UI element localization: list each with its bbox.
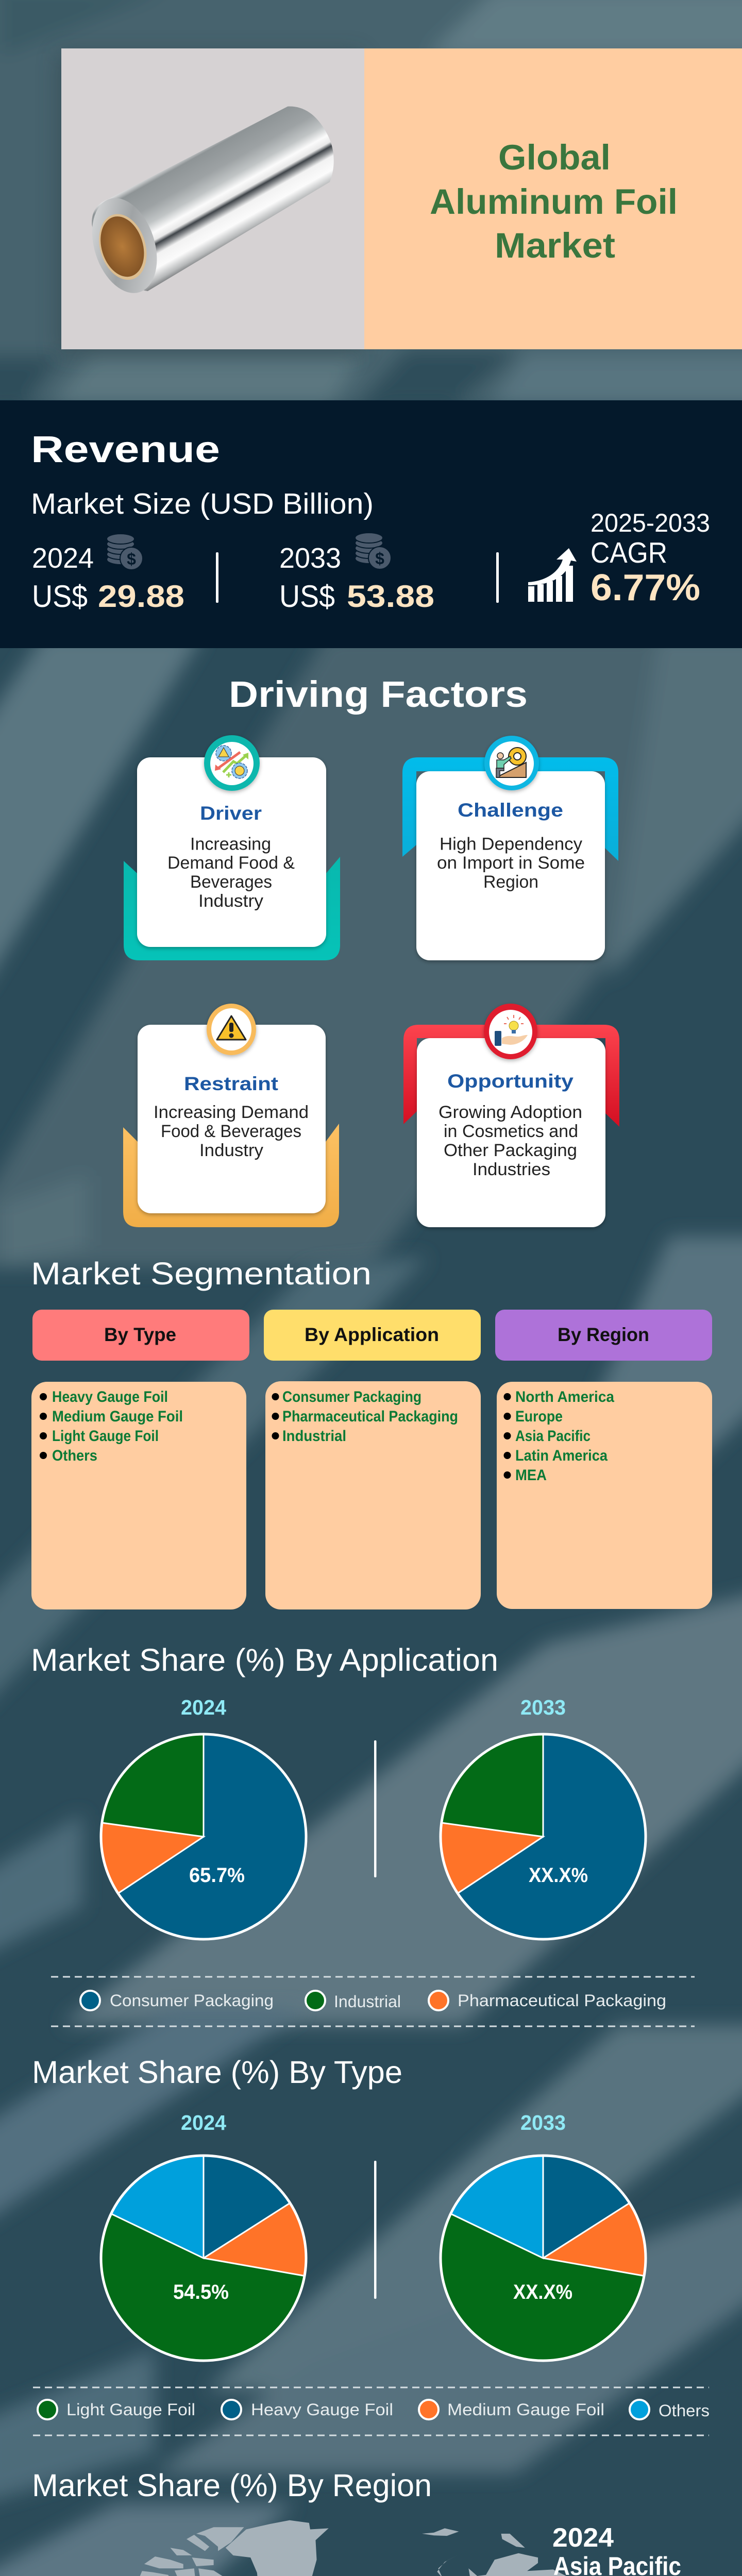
list: region segments: Europe — [515, 1408, 563, 1425]
callout: asia pacific 2024 share — [552, 2523, 681, 2576]
heading: revenue: Revenue — [31, 429, 220, 470]
text: opportunity description: Growing Adoption — [439, 1103, 582, 1122]
stat: 2033 revenue: US$ — [279, 579, 335, 614]
icon: driver gears and arrows — [204, 735, 260, 791]
year label 2024: 2024 — [181, 1696, 226, 1719]
list: type segments — [40, 1388, 183, 1464]
chart: type pies — [101, 2111, 646, 2361]
map: eurasia, africa, oceania — [319, 2528, 668, 2576]
list: type segments: Heavy Gauge Foil — [52, 1388, 168, 1405]
text: challenge description: High Dependency — [440, 835, 582, 854]
list: application segments — [272, 1388, 458, 1445]
text: restraint description: Food & Beverages — [161, 1122, 301, 1141]
chart: application pies — [101, 1696, 646, 1939]
legend: application: Industrial — [334, 1992, 401, 2011]
card: driver — [124, 735, 340, 960]
list: application segments: Industrial — [282, 1428, 346, 1445]
stat: 2033 revenue: 2033 — [279, 542, 341, 574]
column: by application — [264, 1310, 481, 1609]
text: driver description: Increasing — [190, 835, 271, 854]
text: opportunity description: Other Packaging — [444, 1141, 577, 1160]
heading: driving factors: Driving Factors — [229, 674, 528, 715]
year label 2024: 2024 — [181, 2111, 226, 2134]
legend: application — [51, 1977, 695, 2026]
text: opportunity description: in Cosmetics and — [444, 1122, 578, 1141]
list: type segments: Medium Gauge Foil — [52, 1408, 183, 1425]
legend: type: Medium Gauge Foil — [447, 2400, 604, 2419]
text: restraint description: Industry — [199, 1141, 263, 1160]
stat: 2024 revenue: $ — [127, 550, 136, 568]
heading: market segmentation: Market Segmentation — [31, 1256, 372, 1291]
list: region segments: Asia Pacific — [515, 1428, 591, 1445]
column: by type: By Type — [104, 1324, 176, 1345]
text: opportunity description: Industries — [473, 1160, 550, 1179]
text: driver description: Demand Food & — [167, 853, 295, 873]
icon: aluminium foil roll — [81, 107, 334, 301]
text: opportunity description — [439, 1103, 582, 1179]
callout: asia pacific 2024 share: 2024 — [552, 2523, 614, 2553]
stat: CAGR: 6.77% — [591, 567, 700, 608]
pie: type 2024 — [101, 2156, 306, 2361]
text: driver description: Industry — [198, 891, 263, 911]
legend: type — [33, 2387, 710, 2435]
stat: 2024 revenue: 29.88 — [98, 579, 184, 614]
label: driver: Driver — [200, 803, 262, 824]
hero: product image panel — [58, 48, 364, 354]
panel: revenue — [0, 400, 742, 648]
stat: 2033 revenue: 53.88 — [347, 579, 434, 614]
list: region segments: Latin America — [515, 1447, 608, 1464]
map: americas — [70, 2520, 329, 2576]
market size label: Market Size (USD Billion) — [31, 487, 374, 520]
pie: application 2033 — [441, 1734, 646, 1939]
list: type segments: Light Gauge Foil — [52, 1428, 159, 1445]
text: challenge description: on Import in Some — [437, 853, 585, 873]
legend: application: Pharmaceutical Packaging — [458, 1991, 666, 2010]
year label 2033: 2033 — [520, 2111, 566, 2134]
list: region segments: MEA — [515, 1467, 547, 1484]
stat: CAGR: CAGR — [591, 536, 667, 569]
list: type segments: Others — [52, 1447, 97, 1464]
card: opportunity — [403, 1004, 619, 1227]
legend: type: Heavy Gauge Foil — [251, 2400, 393, 2419]
legend: type: Others — [659, 2401, 710, 2420]
legend: application: Consumer Packaging — [110, 1991, 274, 2010]
list: region segments: North America — [515, 1388, 614, 1405]
heading: market share by application: Market Share (%) By Application — [31, 1642, 498, 1677]
pie: type 2033 — [441, 2156, 646, 2361]
column: by region — [495, 1310, 712, 1609]
text: driver description: Beverages — [190, 872, 272, 892]
stat: 2024 revenue: 2024 — [32, 542, 94, 574]
pie: application 2033: XX.X% — [529, 1864, 588, 1887]
title: Market — [495, 226, 615, 265]
stat: 2033 revenue — [279, 533, 434, 614]
pie: type 2033: XX.X% — [513, 2281, 572, 2303]
label: challenge: Challenge — [458, 800, 563, 821]
stat: CAGR — [591, 509, 710, 608]
heading: market share by type: Market Share (%) By Type — [32, 2055, 402, 2090]
title — [430, 138, 678, 265]
list: region segments — [504, 1388, 614, 1484]
text: challenge description: Region — [483, 872, 538, 892]
text: restraint description — [154, 1103, 309, 1160]
icon: challenge climber and gear — [484, 736, 539, 790]
card: challenge — [402, 736, 618, 960]
text: challenge description — [437, 835, 585, 892]
title: Global — [498, 138, 611, 177]
legend: type: Light Gauge Foil — [66, 2400, 195, 2419]
pie: application 2024: 65.7% — [189, 1864, 245, 1887]
icon: bulb over hand — [484, 1004, 537, 1059]
list: application segments: Pharmaceutical Packaging — [282, 1408, 458, 1425]
text: driver description — [167, 835, 295, 911]
icon: warning triangle — [207, 1004, 256, 1055]
stat: 2033 revenue: $ — [375, 549, 384, 568]
stat: CAGR: 2025-2033 — [591, 509, 710, 537]
hero: title panel — [364, 48, 742, 349]
column: by type — [31, 1310, 249, 1609]
card: restraint — [123, 1004, 339, 1227]
pie: type 2024: 54.5% — [173, 2281, 229, 2303]
list: application segments: Consumer Packaging — [282, 1388, 421, 1405]
stat: 2024 revenue — [32, 534, 184, 614]
chart: world map — [70, 2520, 668, 2576]
heading: market share by region: Market Share (%) By Region — [32, 2468, 432, 2503]
stat: 2024 revenue: US$ — [32, 579, 88, 614]
year label 2033: 2033 — [520, 1696, 566, 1719]
text: restraint description: Increasing Demand — [154, 1103, 309, 1122]
pie: application 2024 — [101, 1734, 306, 1939]
label: opportunity: Opportunity — [447, 1071, 574, 1092]
icon: growth chart arrow — [528, 548, 577, 602]
title: Aluminum Foil — [430, 182, 678, 222]
column: by region: By Region — [558, 1324, 649, 1345]
label: restraint: Restraint — [184, 1073, 278, 1094]
column: by application: By Application — [305, 1324, 439, 1345]
